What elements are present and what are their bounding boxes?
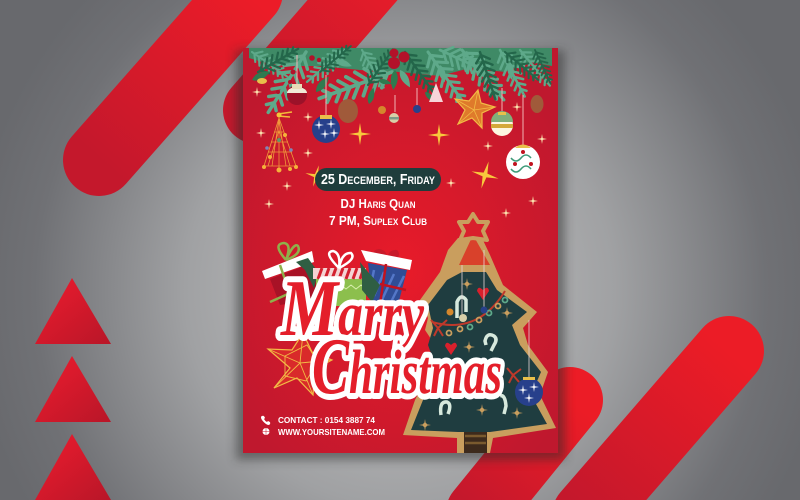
hanging ornaments — [257, 55, 540, 179]
contact block: CONTACT : 0154 3887 74 — [278, 415, 375, 425]
event details: 7 PM, Suplex Club — [329, 213, 427, 228]
garland foliage — [248, 41, 556, 123]
flyer shadow — [236, 50, 565, 460]
Merry Christmas title: Marry — [279, 265, 424, 353]
event details — [329, 196, 427, 228]
Merry Christmas title — [279, 265, 502, 411]
gold star ornament — [455, 90, 495, 128]
date badge — [315, 168, 441, 191]
wire tree ornament — [262, 112, 298, 172]
event details: DJ Haris Quan — [340, 196, 416, 211]
pine cones — [338, 95, 544, 123]
flyer panel — [243, 48, 558, 453]
contact block — [261, 415, 385, 437]
triangles — [35, 278, 111, 500]
globe icon — [262, 428, 270, 435]
gold star — [268, 333, 332, 395]
sparkles — [252, 87, 547, 218]
date badge: 25 December, Friday — [321, 171, 436, 188]
gifts — [262, 243, 412, 306]
Merry Christmas title: Christmas — [312, 323, 502, 411]
christmas tree — [403, 214, 556, 453]
phone icon — [261, 416, 270, 425]
decorative red capsules — [99, 0, 729, 500]
contact block: WWW.YOURSITENAME.COM — [278, 427, 385, 437]
